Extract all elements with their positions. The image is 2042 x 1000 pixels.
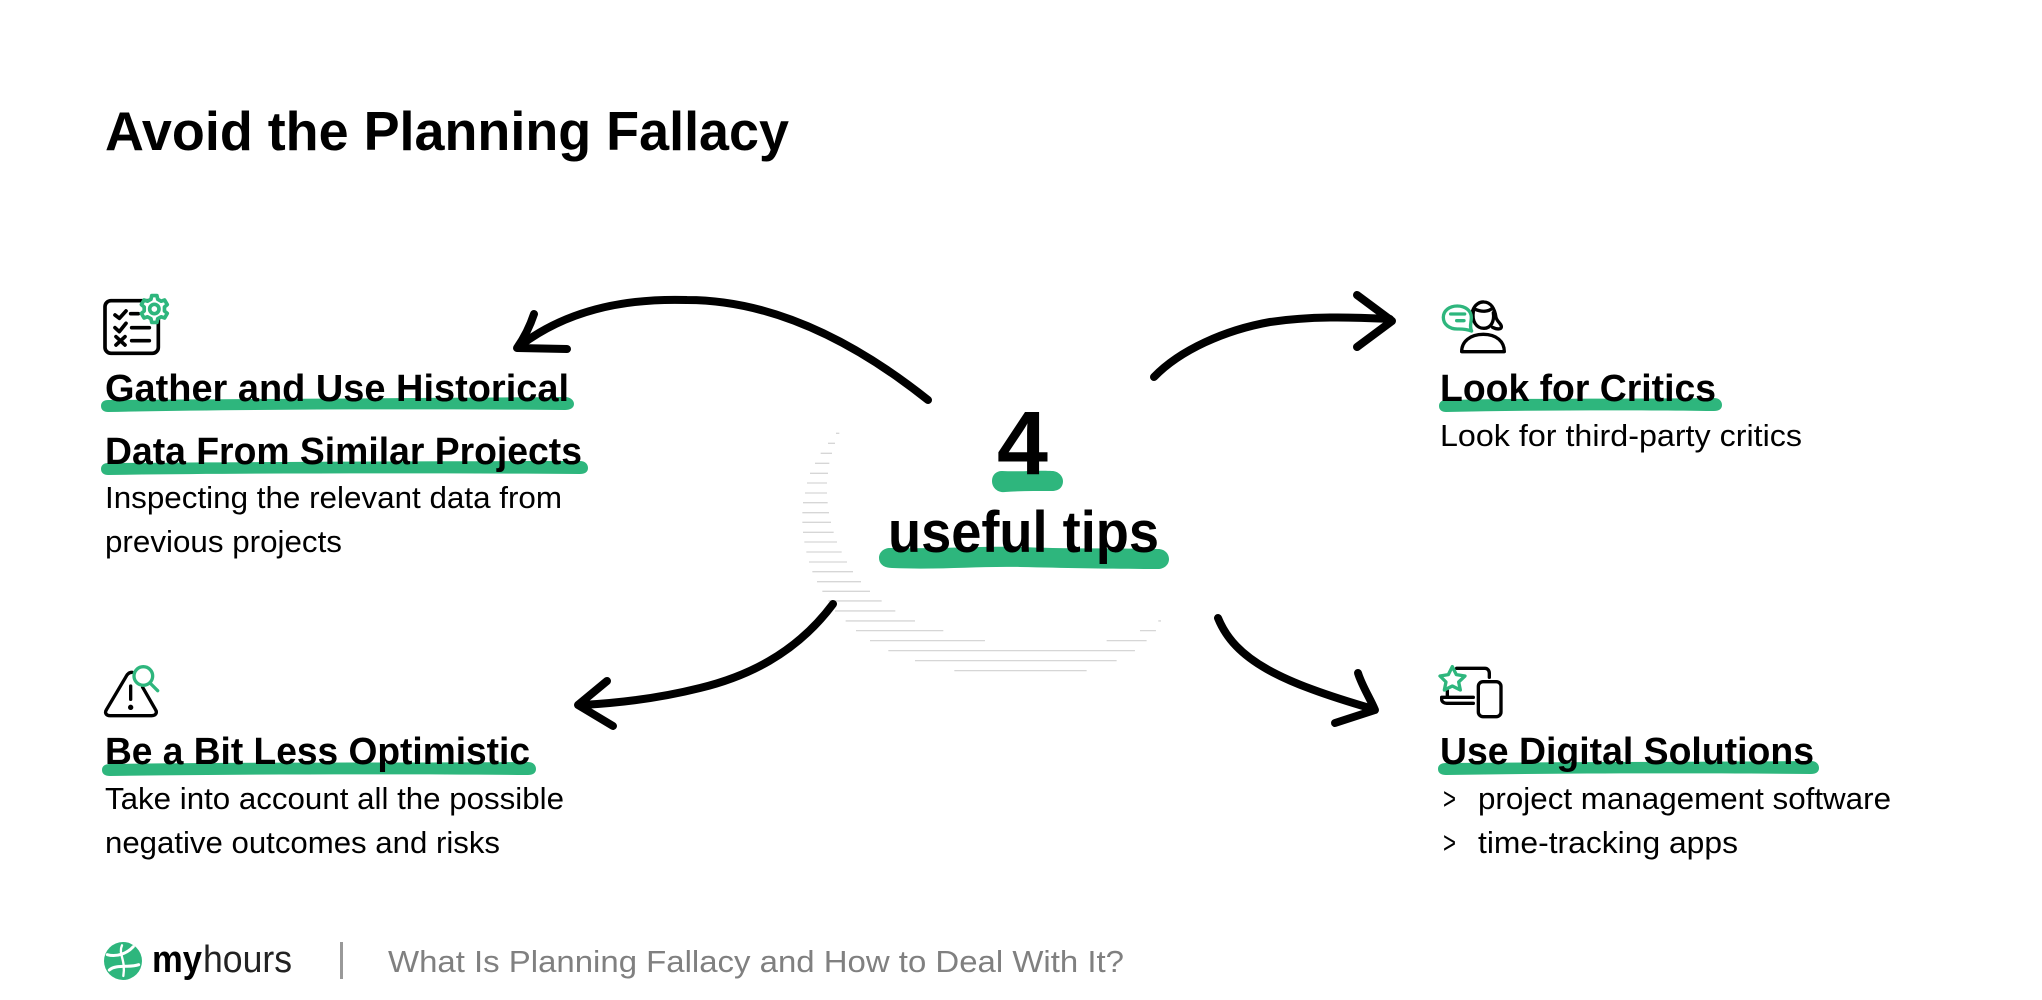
bullet list: time-tracking apps — [1478, 825, 1738, 860]
logo wordmark: my — [152, 939, 202, 981]
underline — [1438, 761, 1819, 775]
number 4: 4 — [997, 394, 1048, 494]
heading line 1: Gather and Use Historical — [105, 368, 569, 410]
underline line 2 — [101, 461, 588, 475]
panel: be less optimistic — [102, 667, 564, 860]
bullet list: > — [1443, 781, 1456, 816]
arrow to top-right tip — [1154, 295, 1392, 377]
panel: use digital solutions — [1438, 667, 1891, 860]
arrow to bottom-left tip — [578, 604, 833, 726]
panel: gather historical data — [101, 296, 588, 559]
arrow to bottom-right tip — [1218, 618, 1375, 723]
icon: warning triangle with magnifier — [106, 667, 158, 716]
body text — [105, 781, 564, 860]
icon: person with speech bubble — [1443, 302, 1504, 352]
heading: Use Digital Solutions — [1440, 731, 1814, 773]
panel: look for critics — [1439, 302, 1802, 453]
bullet list: project management software — [1478, 781, 1891, 816]
bullet list: > — [1443, 825, 1456, 860]
body text: negative outcomes and risks — [105, 825, 500, 860]
body text: Inspecting the relevant data from — [105, 480, 562, 515]
underline — [102, 762, 536, 776]
body text — [105, 480, 562, 559]
footer caption: What Is Planning Fallacy and How to Deal With It? — [388, 944, 1124, 979]
title: Avoid the Planning Fallacy — [105, 100, 789, 162]
underline under 4 — [992, 471, 1063, 492]
icon: devices with star — [1440, 667, 1501, 717]
center heading: 4 useful tips — [879, 394, 1169, 569]
underline under useful tips — [879, 547, 1169, 569]
icon: myhours logo — [104, 942, 142, 980]
body text: Take into account all the possible — [105, 781, 564, 816]
heading: Be a Bit Less Optimistic — [105, 731, 530, 773]
body text: previous projects — [105, 524, 342, 559]
heading: Look for Critics — [1440, 368, 1716, 410]
decorative hatched circle shadow — [802, 433, 1161, 671]
body text: Look for third-party critics — [1440, 418, 1802, 453]
arrow to top-left tip — [517, 300, 928, 400]
logo wordmark: hours — [203, 939, 292, 981]
footer — [104, 939, 1124, 981]
heading line 2: Data From Similar Projects — [105, 431, 582, 473]
underline — [1439, 398, 1722, 412]
icon: checklist with gear — [105, 296, 167, 353]
text useful tips: useful tips — [888, 500, 1159, 565]
logo wordmark — [152, 939, 292, 981]
underline line 1 — [101, 397, 574, 412]
bullet list — [1443, 781, 1891, 860]
